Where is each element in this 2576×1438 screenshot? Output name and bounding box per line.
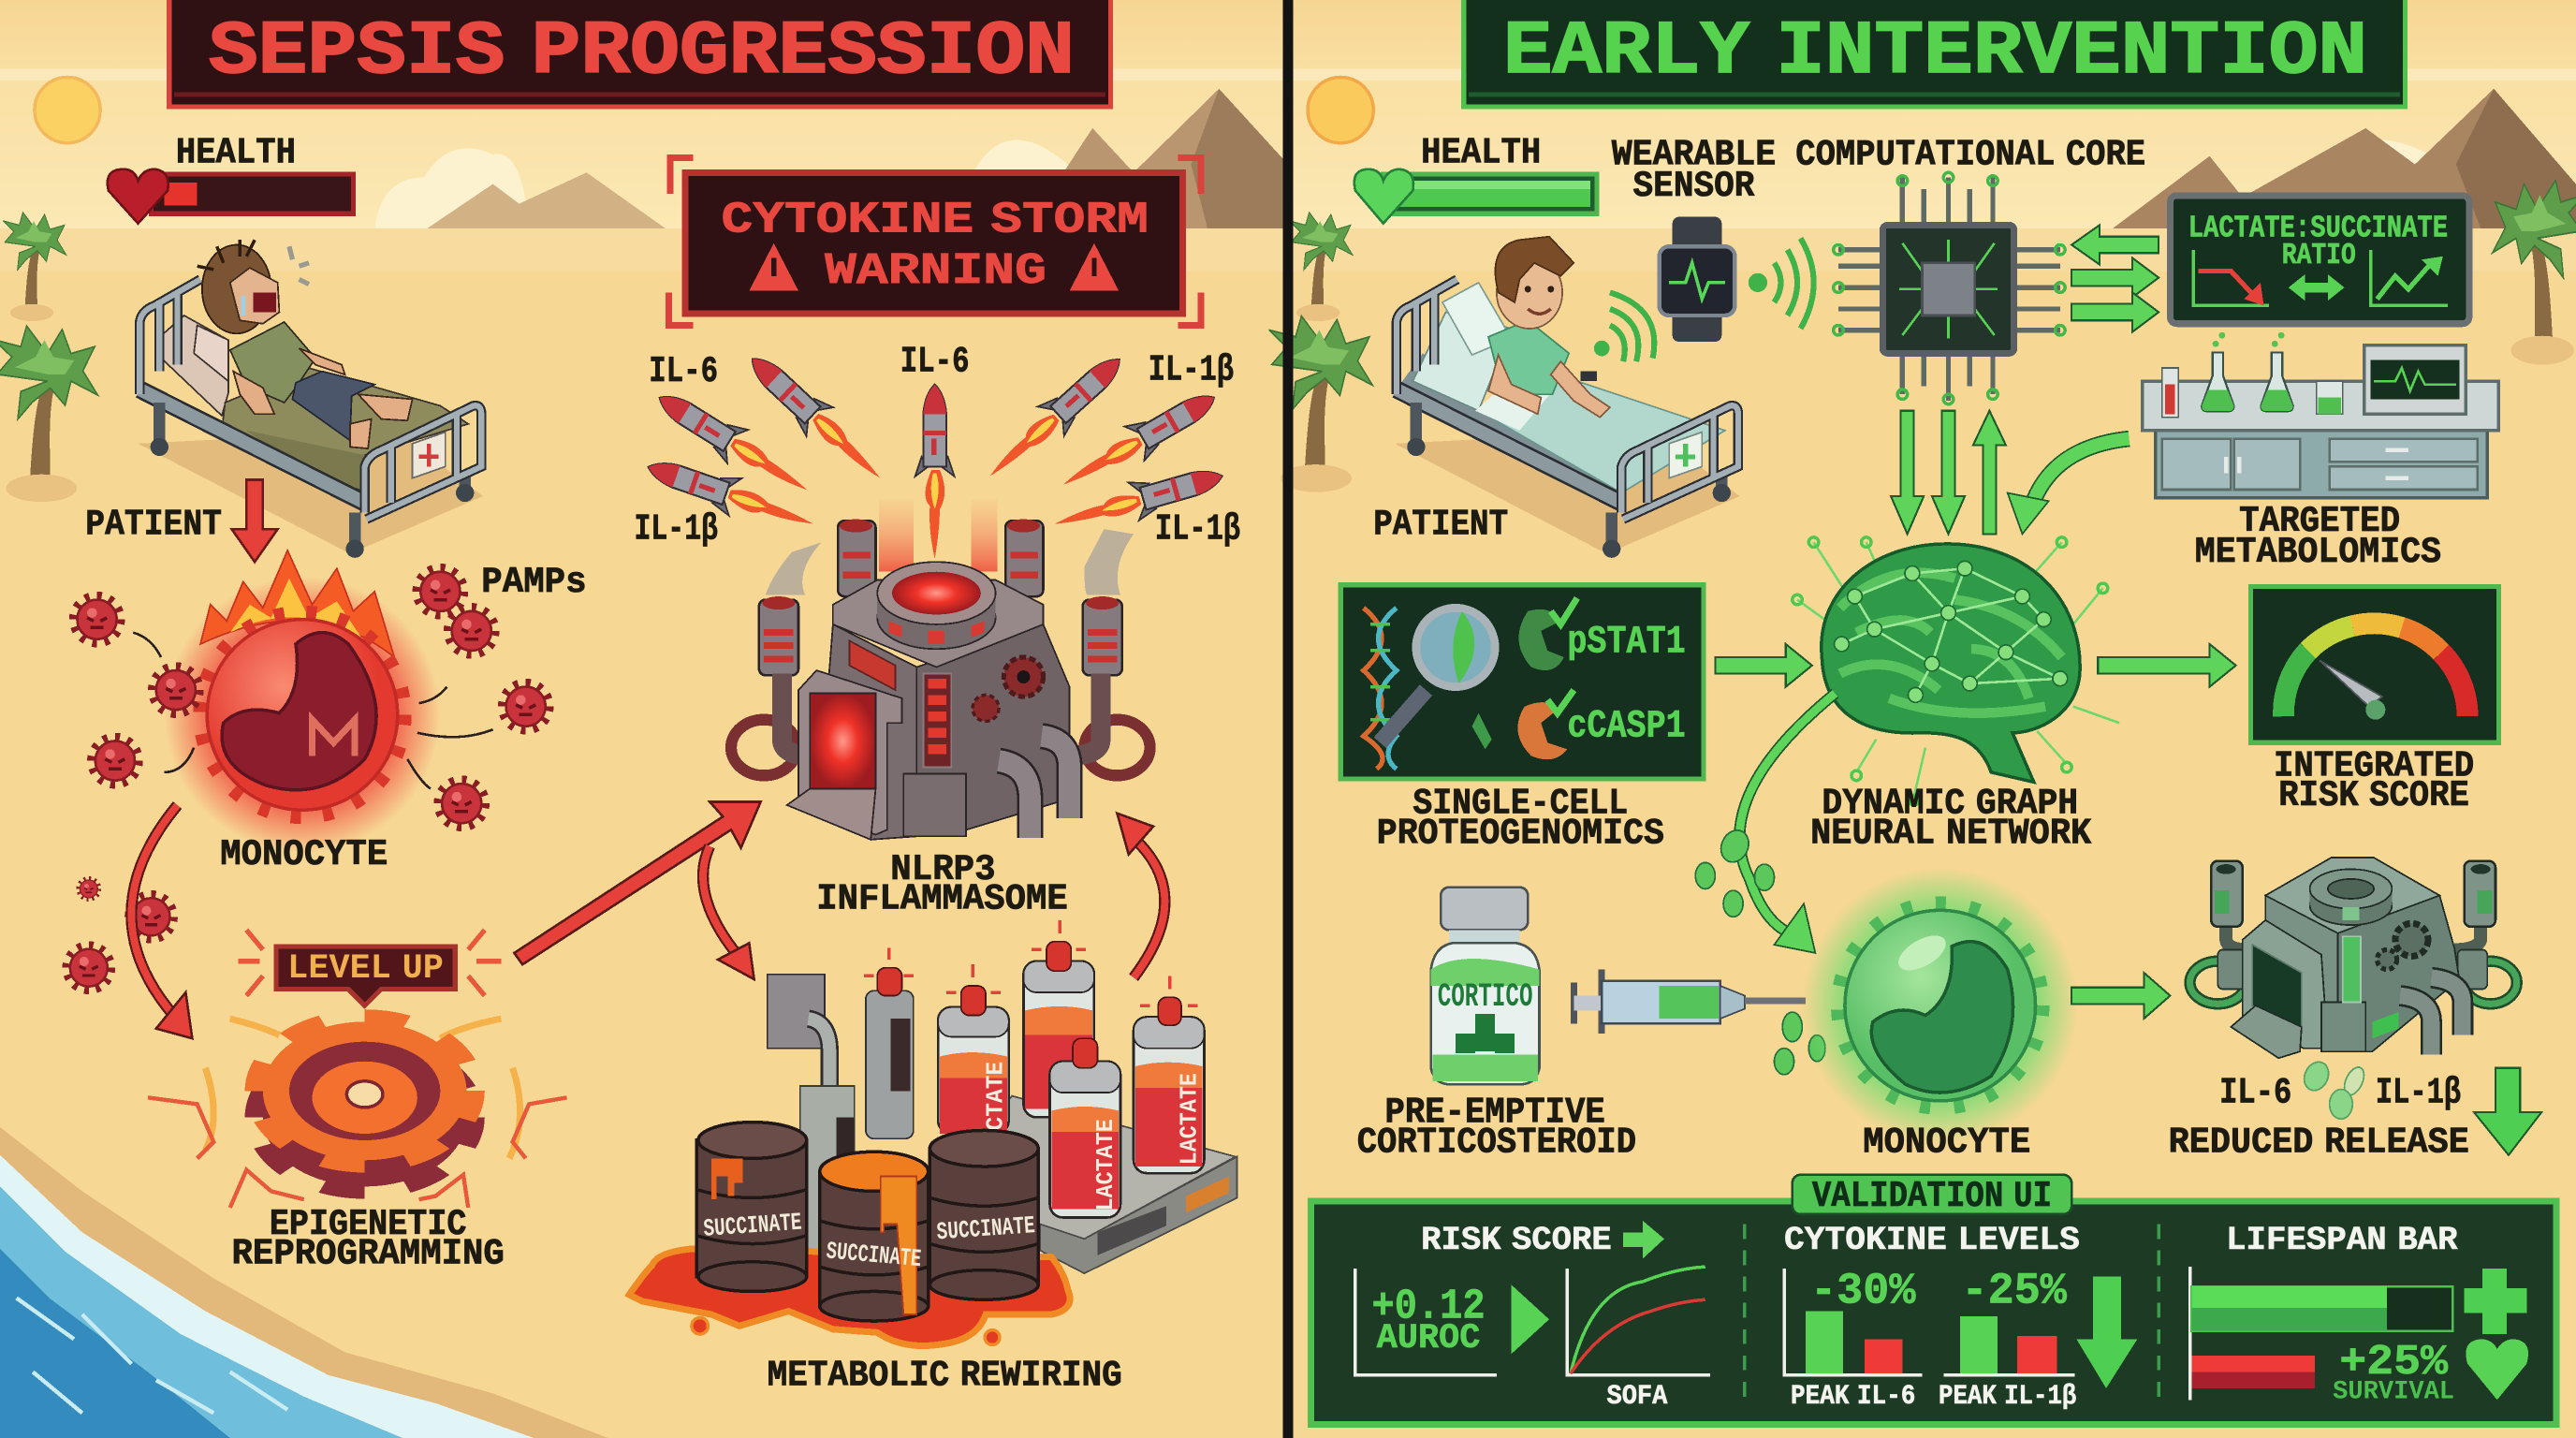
validation: lifespan bar: LIFESPAN BAR (2226, 1222, 2459, 1259)
panel: lactate succinate ratio: RATIO (2282, 240, 2356, 272)
centre divider (1283, 0, 1293, 1438)
labels: wearable sensor: WEARABLE (1612, 135, 1776, 176)
panel: lactate succinate ratio (2170, 196, 2469, 324)
icon: computer chip (1834, 172, 2065, 404)
label: NLRP3 inflammasome: INFLAMMASOME (816, 879, 1068, 920)
panel: risk gauge (2250, 587, 2498, 742)
label: patient (left): PATIENT (85, 504, 222, 545)
label: PAMPs: PAMPs (481, 562, 587, 603)
labels: wearable sensor (1612, 135, 1776, 207)
labels: single-cell proteogenomics: PROTEOGENOMICS (1377, 813, 1664, 854)
warning box: cytokine storm: WARNING (825, 247, 1046, 297)
labels: dynamic graph neural network (1810, 784, 2092, 854)
title: early intervention (1464, 0, 2405, 107)
labels: dynamic graph neural network: NEURAL NETWORK (1810, 813, 2092, 854)
label: targeted metabolomics (2195, 501, 2441, 573)
patient: healthy in bed (1395, 237, 1740, 558)
validation: risk score: +0.12 (1372, 1283, 1486, 1331)
arrow: inflammasome to metabolic rewiring (double) (703, 846, 754, 979)
label: targeted metabolomics: METABOLOMICS (2195, 532, 2441, 573)
palm trees: left panel (0, 213, 97, 502)
icon: syringe (1573, 969, 1825, 1075)
reduced release: IL-6 and IL-1β (2169, 1058, 2469, 1163)
arrow: metabolic rewiring to inflammasome (1117, 814, 1164, 977)
barrels: SUCCINATE (825, 1237, 922, 1273)
labels: cytokines (634, 342, 1240, 550)
labels: dynamic graph neural network: DYNAMIC GRAPH (1822, 784, 2078, 825)
icon: glowing gear (148, 1018, 567, 1208)
title: early intervention: EARLY INTERVENTION (1503, 10, 2367, 95)
label: metabolic rewiring: METABOLIC REWIRING (768, 1355, 1122, 1396)
validation: lifespan bar: +25% (2339, 1338, 2449, 1387)
reduced release: IL-6 and IL-1β: IL-6 (2219, 1073, 2291, 1114)
warning box: cytokine storm: CYTOKINE STORM (722, 196, 1149, 245)
icon: smartwatch (1660, 217, 1734, 342)
arrow: brain to monocyte with drug pills (1695, 694, 1835, 953)
lab bench: targeted metabolomics (2143, 332, 2498, 498)
barrels (696, 1123, 1038, 1321)
labels: integrated risk score (2274, 745, 2474, 816)
label: NLRP3 inflammasome (816, 849, 1068, 920)
arrow: monocyte to epigenetic gear (131, 805, 192, 1038)
missiles: cytokines (642, 345, 1227, 559)
validation: risk score: SOFA (1606, 1380, 1667, 1412)
barrels: SUCCINATE (936, 1211, 1036, 1246)
health bar: full (1354, 133, 1597, 224)
icon: corticosteroid vial (1431, 888, 1540, 1084)
labels: corticosteroid (1357, 1093, 1636, 1163)
label: monocyte (left): MONOCYTE (220, 834, 388, 875)
patient: sick in bed (138, 240, 483, 558)
sun: left (35, 77, 100, 143)
label: targeted metabolomics: TARGETED (2239, 501, 2400, 542)
label: computational core: COMPUTATIONAL CORE (1795, 135, 2145, 176)
validation: cytokine levels (1784, 1222, 2137, 1412)
metabolic rewiring: lactate canisters and succinate barrels (629, 920, 1237, 1345)
labels: corticosteroid: PRE-EMPTIVE (1385, 1093, 1605, 1134)
icon: corticosteroid vial: CORTICO (1438, 978, 1532, 1016)
arrow: monocyte to reactor (2071, 973, 2170, 1019)
validation: cytokine levels: PEAK IL-6 (1791, 1380, 1915, 1412)
title: sepsis progression: SEPSIS PROGRESSION (209, 10, 1075, 95)
health bar: low (108, 133, 353, 224)
validation: lifespan bar: SURVIVAL (2333, 1378, 2454, 1407)
labels: wearable sensor: SENSOR (1633, 166, 1755, 207)
arrows: chip and ratio panel (2071, 225, 2159, 332)
monocyte: calmed (1802, 868, 2078, 1143)
label: patient (right): PATIENT (1373, 504, 1508, 545)
labels: cytokines: IL-6 (649, 351, 718, 392)
background: right panel (1288, 0, 2576, 1438)
labels: single-cell proteogenomics: SINGLE-CELL (1412, 784, 1628, 825)
label: monocyte (right): MONOCYTE (1863, 1122, 2030, 1163)
arrow: patient to monocyte (232, 479, 278, 562)
warning box: cytokine storm (668, 157, 1201, 325)
label: epigenetic reprogramming (232, 1204, 505, 1275)
validation: risk score: AUROC (1377, 1319, 1480, 1358)
badge: level up: LEVEL UP (287, 949, 444, 989)
sun: right (1308, 77, 1373, 143)
canisters: LACTATE (1091, 1119, 1120, 1211)
labels: cytokines: IL-1β (1149, 349, 1234, 390)
title: sepsis progression (169, 0, 1110, 107)
badge: level up (239, 930, 501, 1005)
arrow: proteogenomics to brain (1715, 644, 1812, 687)
canisters: LACTATE (1176, 1073, 1204, 1165)
panel: single-cell proteogenomics: cCASP1 (1567, 703, 1686, 748)
panel: validation UI (1311, 1175, 2556, 1425)
validation: cytokine levels: CYTOKINE LEVELS (1784, 1222, 2080, 1259)
labels: single-cell proteogenomics (1377, 784, 1664, 854)
validation: risk score (1355, 1221, 1710, 1412)
palm trees: right panel (1269, 181, 2576, 492)
panel: validation UI: VALIDATION UI (1812, 1176, 2052, 1217)
canisters: CTATE (982, 1062, 1010, 1130)
background: left panel (0, 0, 1288, 1438)
panel: single-cell proteogenomics (1340, 585, 1704, 779)
panel: lactate succinate ratio: LACTATE:SUCCINATE (2188, 212, 2448, 247)
labels: integrated risk score: INTEGRATED (2274, 745, 2474, 786)
label: epigenetic reprogramming: EPIGENETIC (270, 1204, 466, 1245)
canisters (938, 920, 1204, 1217)
labels: corticosteroid: CORTICOSTEROID (1357, 1122, 1636, 1163)
validation: cytokine levels: -25% (1962, 1268, 2067, 1317)
viruses: PAMPs (68, 570, 547, 988)
icon: wifi from watch (1751, 238, 1814, 329)
monocyte: inflamed (165, 550, 440, 853)
validation: lifespan bar (2190, 1222, 2528, 1407)
reduced release: IL-6 and IL-1β: IL-1β (2376, 1073, 2461, 1114)
label: epigenetic reprogramming: REPROGRAMMING (232, 1234, 505, 1275)
health bar: full: HEALTH (1421, 133, 1541, 174)
sea and beach (0, 1127, 607, 1438)
arrow: reduced release down (2474, 1068, 2541, 1155)
validation: cytokine levels: PEAK IL-1β (1939, 1380, 2076, 1412)
health bar: low: HEALTH (176, 133, 296, 174)
validation: risk score: RISK SCORE (1421, 1222, 1612, 1259)
labels: cytokines: IL-1β (634, 509, 718, 550)
arrow: gear to inflammasome (514, 801, 761, 964)
reduced release: IL-6 and IL-1β: REDUCED RELEASE (2169, 1122, 2469, 1163)
icon: wifi from patient (1597, 292, 1654, 361)
labels: cytokines: IL-6 (900, 342, 970, 383)
machine: calmed inflammasome (2190, 858, 2517, 1058)
arrow: bench to brain (2008, 439, 2130, 534)
labels: integrated risk score: RISK SCORE (2278, 775, 2469, 816)
labels: cytokines: IL-1β (1155, 509, 1240, 550)
icon: graph neural network brain (1793, 537, 2119, 805)
validation: cytokine levels: -30% (1810, 1268, 1916, 1317)
arrow: brain to risk score (2098, 644, 2236, 687)
label: NLRP3 inflammasome: NLRP3 (890, 849, 996, 890)
barrels: SUCCINATE (702, 1209, 803, 1243)
NLRP3 inflammasome machine (731, 500, 1150, 840)
panel: single-cell proteogenomics: pSTAT1 (1567, 620, 1686, 665)
arrows: chip and brain (1891, 411, 2006, 534)
